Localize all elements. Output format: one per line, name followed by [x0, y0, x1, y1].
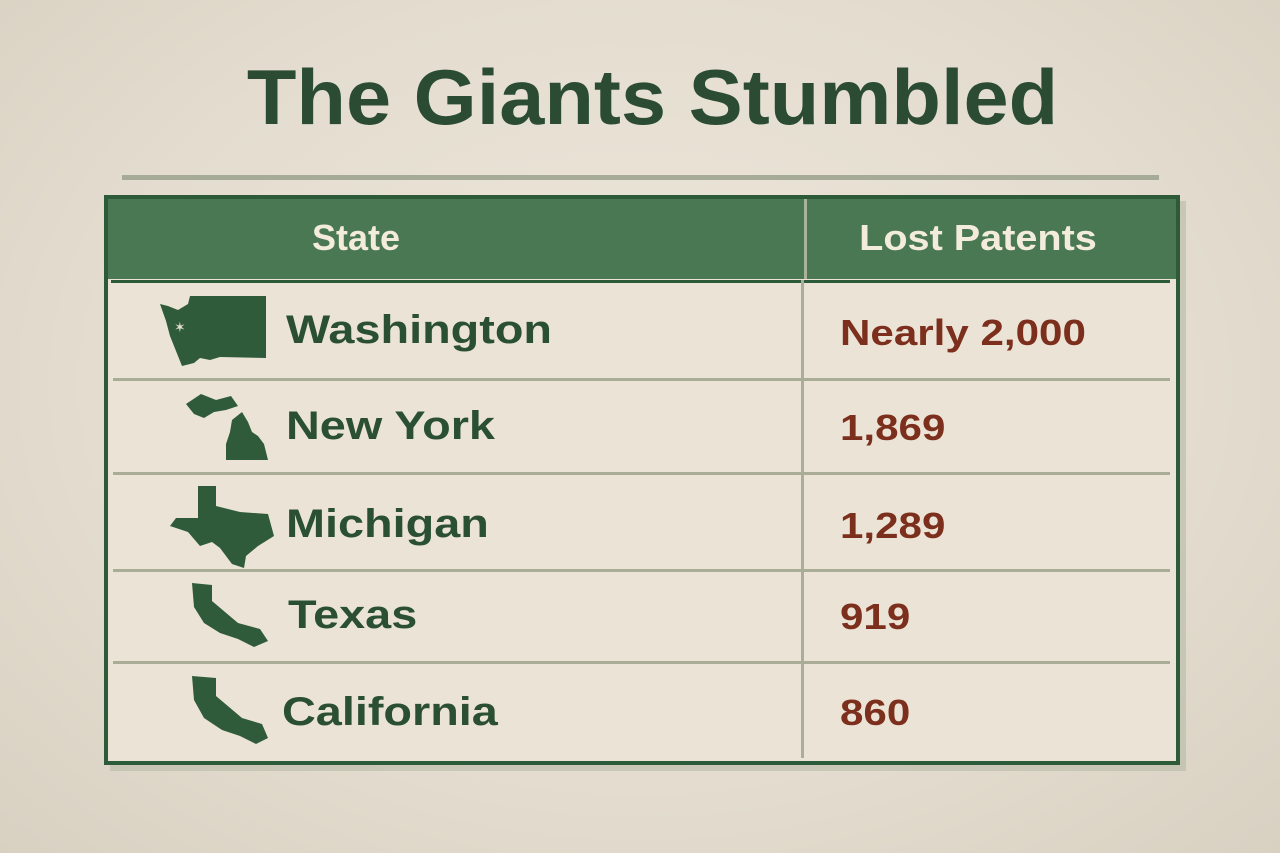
value: 919 — [840, 596, 910, 637]
label: Washington — [286, 308, 552, 352]
label: Michigan — [286, 502, 489, 546]
label: Texas — [288, 593, 417, 637]
icon: Washington shape: ✶ — [174, 319, 186, 335]
row: Texas — [192, 583, 910, 647]
icon: Washington shape — [160, 296, 266, 366]
value: 860 — [840, 692, 910, 733]
header: Lost Patents: Lost Patents — [859, 217, 1097, 258]
icon: California shape — [192, 676, 268, 744]
icon: Texas shape — [170, 486, 274, 568]
header: State: State — [312, 217, 400, 258]
icon: California shape — [192, 583, 268, 647]
row: Washington — [160, 296, 1086, 366]
value: 1,869 — [840, 407, 945, 448]
header row — [108, 199, 1176, 279]
table — [104, 195, 1186, 771]
value: 1,289 — [840, 505, 945, 546]
title: The Giants Stumbled — [247, 53, 1058, 141]
icon: Michigan-like shape — [186, 394, 268, 460]
row: New York — [186, 394, 945, 460]
row: California — [192, 676, 910, 744]
label: New York — [286, 404, 495, 448]
row: Michigan — [170, 486, 945, 568]
value: Nearly 2,000 — [840, 312, 1086, 353]
label: California — [282, 690, 498, 734]
